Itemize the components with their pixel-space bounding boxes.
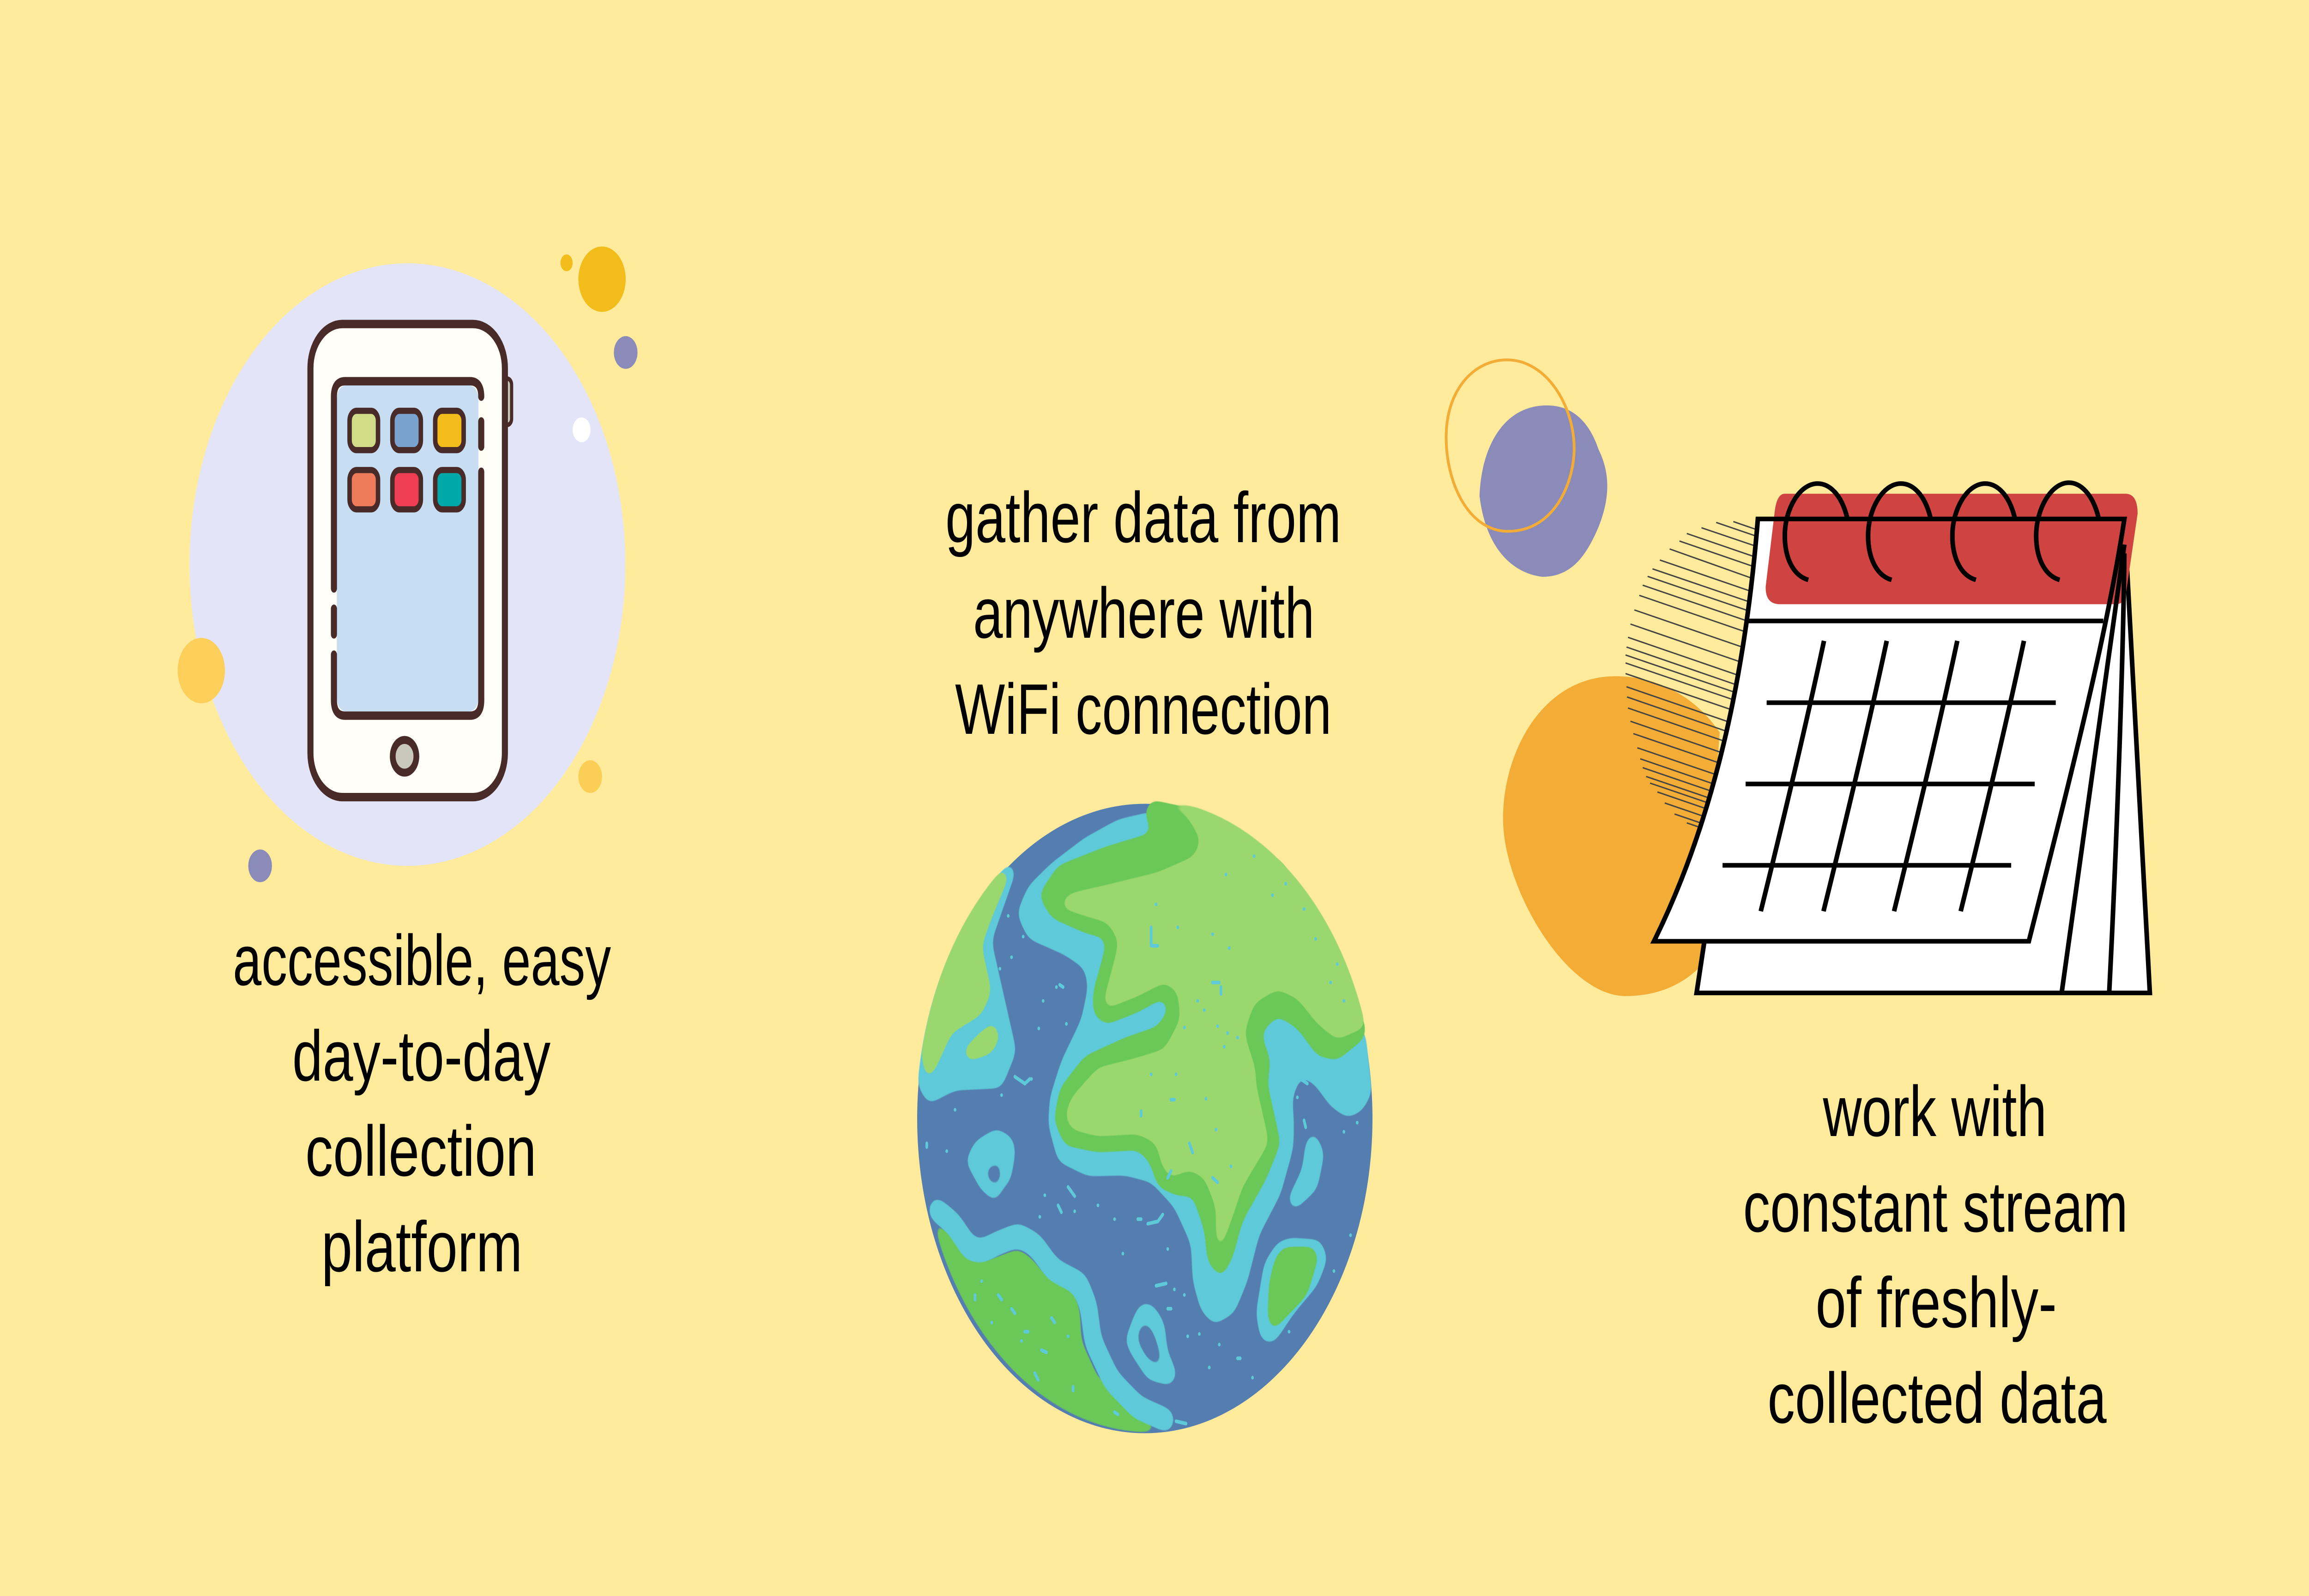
text: calendar caption: of freshly- bbox=[1816, 1263, 2057, 1342]
icon: earth globe bbox=[917, 799, 1372, 1433]
main continent bbox=[1016, 799, 1372, 1325]
calendar grid bbox=[1723, 641, 2056, 911]
icon: desk calendar bbox=[1654, 483, 2150, 993]
lavender circle backdrop bbox=[189, 263, 625, 866]
orange outline ring bbox=[1446, 360, 1574, 531]
text: globe caption: gather data from bbox=[945, 478, 1341, 557]
text: phone caption: platform bbox=[321, 1207, 522, 1287]
hatched texture blob bbox=[1626, 521, 1763, 849]
binder rings bbox=[1785, 483, 2098, 580]
left continent bbox=[918, 862, 1016, 1104]
text: phone caption: accessible, easy bbox=[233, 920, 611, 1000]
purple blob bbox=[1480, 405, 1607, 577]
text: globe caption: anywhere with bbox=[973, 573, 1314, 653]
orange blob bbox=[1503, 676, 1720, 996]
text: phone caption: day-to-day bbox=[292, 1016, 550, 1096]
text: globe caption bbox=[945, 478, 1341, 749]
texture specks bbox=[927, 856, 1357, 1424]
panel: calendar illustration bbox=[1446, 360, 2150, 996]
panel: phone illustration bbox=[178, 247, 637, 882]
text: calendar caption: collected data bbox=[1767, 1358, 2107, 1438]
decorative dots bbox=[178, 247, 637, 882]
text: calendar caption: constant stream bbox=[1743, 1167, 2128, 1247]
islands bbox=[965, 1128, 1328, 1386]
icon: smartphone bbox=[310, 324, 512, 797]
text: phone caption: collection bbox=[305, 1111, 537, 1191]
text: calendar caption bbox=[1743, 1071, 2128, 1438]
bottom-left continent bbox=[932, 1210, 1166, 1432]
text: calendar caption: work with bbox=[1823, 1071, 2047, 1151]
text: phone caption bbox=[233, 920, 611, 1287]
text: globe caption: WiFi connection bbox=[955, 669, 1331, 749]
